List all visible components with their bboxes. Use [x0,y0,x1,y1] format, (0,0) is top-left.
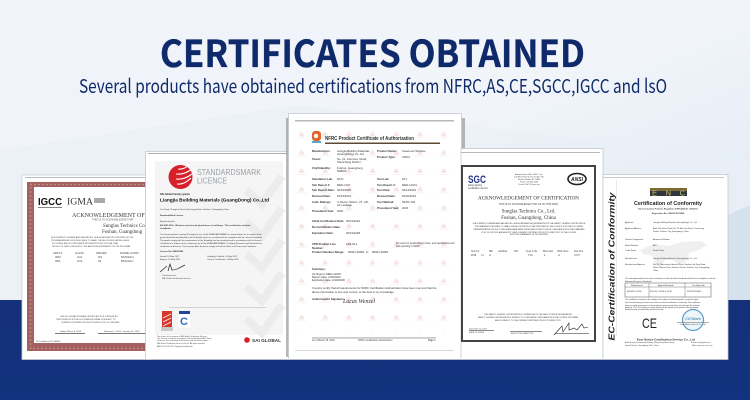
product information: NFRC 102 [402,200,416,204]
red badge [161,311,173,331]
SGCC logo: safety glazing [468,184,483,187]
IGMA logo: IGMA [67,198,93,208]
product information: Sim Report #: [312,183,330,187]
signature lines: Friday, March 8, 2024 [60,330,82,333]
signature lines: IG Certified by ETL SEMKO [36,340,61,343]
certified product table: 4810 [55,255,61,259]
product information: MED-1047 [337,183,351,187]
EC heading: Certification of Conformity [634,201,702,207]
licence details [160,208,263,261]
certificate: IGCC IGMA: THIS IS TO ACKNOWLEDGE THAT [92,218,134,222]
footer statement: CERTIFICATION IN THE IGCC/IGMA PROGRAM IS SUBJECT TO [56,318,116,321]
product information: above information is true and correct, to the best of my knowledge. [312,290,395,294]
small print: SAI Global Certification Services Pty Ltd. All rights reserved. [157,342,205,345]
conformity statement: does not imply assessment of the production process and does not authorize the marking [625,304,700,307]
product table: A [558,254,560,257]
footer statement: SAFETY GLAZING CERTIFICATION IS SUBJECT TO CONTINUING COMPLIANCE WITH THE COUNCIL PROGRAM [478,316,578,319]
issuer footer: East Notice Certification Service Co., Ltd [637,338,695,342]
product information: Initial Certification Date: [312,219,344,223]
product information: Expiration date: 2/19/2028 [312,278,345,282]
product information: MED-1047a [402,183,417,187]
product information: Sim Report Date: [312,188,335,192]
product information: and reporting in NFRC [396,245,420,248]
product table: 9036 [471,254,477,257]
product table: TTG [528,254,533,257]
certificate: EC conformity: Registration No.: ENC/21/01234/08 [652,212,685,215]
certificate: Standardsmark Licence: SAI Global Certification Services [162,277,191,280]
body copy: FOLLOWED ARE IN COMPLIANCE WITH ASTM E2190 FOR DUAL SEAL [52,242,119,245]
licence details: Current Certification: 14 May 2022 [207,258,239,261]
product information: Manufacturer: [312,149,331,153]
body copy: PROGRAM AND AS SUCH IS ELIGIBLE TO LABEL THE BELOW INSULATING GLASS [51,239,130,242]
licence details: Expires: 14 May 2025 [160,258,181,261]
product information: Procedural Year: [377,206,399,210]
conformity statement: and manufacturing processes have been checked and found in conformity. This certificate [625,301,700,304]
company details: Liangjia Building Materials (GuangDong) Co., Ltd. [653,221,697,224]
footer statement: AND IS SUBJECT TO THE CURRENT CERTIFIED PRODUCTS DIRECTORY [495,319,562,322]
standards table: EN14351-1:2006 [627,291,641,293]
contact block [514,173,544,186]
certificate: SGCC [461,148,603,360]
issuer footer [625,338,713,347]
product information: Product Type: [377,155,396,159]
product table: Attribute [498,250,508,253]
standards table: KN21031232801 [687,291,701,293]
product information: NFTL [337,177,344,181]
product information: Liangjia Building Materials [337,149,370,153]
contact block: Administrative Office: SGCC, Inc. [515,173,543,176]
company details: Liangjia Building Materials (GuangDong) Co., Ltd. [653,257,697,260]
product information: 2020 [402,206,409,210]
product information: Air Report: MED-1047b [312,272,342,276]
certificate: NFRC [286,114,465,360]
conformity stamp: East Notice Service Co., Ltd [680,323,706,326]
product information: 00001-00001 [348,250,365,254]
certified product table [53,251,140,263]
product information: Procedural Year: [312,209,334,213]
product information: 2020 [337,209,344,213]
Standardsmark logo [168,164,192,189]
acknowledgement heading: ACKNOWLEDGEMENT OF [72,213,145,219]
product information: Product Name: [377,149,397,153]
company details: Model Number: [625,245,639,247]
product table: 14 [481,254,484,257]
small print: This licence is the property of SAI Global Certification Services [157,335,207,338]
licence details: Certification Is Subject to the continuing use of the STANDARDSMARK. Certifying Schemes and Schedules for [160,242,262,245]
licence heading: STANDARDSMARK [197,168,262,177]
company details: Kinho Power [653,250,665,252]
product information: City/State/Zip: [312,166,331,170]
ANSI seal: ANSI [570,177,584,183]
product information: I hereby certify that all requirements for NFRC Certification Authorization have been met and that the [312,286,437,290]
certificate: Standardsmark Licence: Liangjia Building Materials (GuangDong) Co.,Ltd [160,198,269,204]
company details: The submitted product has been tested by us with the listed standard and found in compliance with the [625,277,717,280]
SAI Global logo: SAI GLOBAL [252,338,281,343]
company details: Aluminum Window [653,238,670,241]
conformity statement [625,298,700,311]
company details: Product Designation: [625,238,644,241]
company details: A19 [653,244,657,247]
issuer footer: Add: Huimei Commercial Building, Hang Kong Road, Hong [625,341,674,344]
company details: Manufacturer Address: [625,263,646,266]
product information: Product Number Range: [312,250,344,254]
product information: 02/19/2028 [346,231,360,235]
product information: U-Factor, SHGC, VT, CR, [337,200,369,204]
certified product table: CERT # [53,251,63,255]
body copy: CPSC 16 CFR 1201 AND ANSI Z97.1 AND CURRENT CERTIFIED PRODUCTS DIRECTORY OF THE COUNCIL [481,231,577,234]
product information: 02/03/2024 [337,188,351,192]
conformity statement: products. The CE marking as shown below can be affixed to the product after preparing [625,306,698,309]
NFRC footer [312,338,436,342]
product information: Test Report #: [377,183,396,187]
certificate: SGCC: Foshan, Guangdong, China [501,216,557,221]
signature lines: DATE OF ISSUE [469,331,485,334]
licence details: installation [160,227,172,230]
signature lines: EXECUTIVE DIRECTOR [511,333,534,335]
product table: A [489,254,491,257]
body copy [473,222,586,236]
SGCC logo: SGC [468,174,486,186]
accreditation badge [178,311,191,328]
company details: Add. 20th Jinhe Road, No. 21 Area 3rd Road, Chancheng [653,227,704,230]
licence details: Issued: 14 May 2022 [160,256,180,258]
signature [160,264,185,272]
conformity stamp [677,310,709,330]
small print: ABN 67 050 611 642. Registered in Australia. [157,345,194,348]
contact block: E-mail: SGCC@sgcc.org [519,183,539,186]
CE mark: CE [642,315,657,331]
signatory: Chief Executive [162,274,177,277]
product information: 528000 [337,169,347,173]
product information: Foshan, Guangdong [337,166,363,170]
certificate: EC conformity: EU Construction Products Regulation (CPR) (EU) No. 305/2011 [638,208,699,210]
product table [471,250,584,257]
footer statement: CURRENT CERTIFIED PRODUCTS DIRECTORY OF THE DATE [61,321,120,324]
certified product table: FRAME CONST. [120,251,140,255]
product table: Test Site [574,250,584,253]
company details: Applicant: [625,221,634,224]
company details: No. 20 Chancheng Industrial Zone, Number 3rd Ring Road [653,263,705,266]
product information [312,149,455,301]
ANSI seal [568,174,586,184]
conformity statement: the declaration of conformity and technical file. [625,308,664,311]
product information: Re-Certification Date: [312,225,341,229]
licence details: Licence No: SMKM1542 [160,250,184,253]
company name: Sunglas Technics Co. [103,224,146,229]
IGCC logo: IGCC [38,196,62,208]
product information: NTL [402,177,408,181]
standards table: Test Report No. [692,284,706,287]
ENC logo: ENC [652,188,686,197]
small print: This Licence is issued in accordance with the Standards Mark Terms [157,337,212,340]
product information: CPD Product Line [312,242,336,246]
licence details: Manufactured to [160,220,176,223]
signature lines [36,330,146,343]
certified product table: GLASS [75,251,84,255]
certificate: IGCC IGMA: Foshan, Guangdong [102,230,143,235]
product information: Air Leakage [337,203,352,207]
product table: 4 [544,254,546,257]
signature lines: February 1, 2024 - January 31, 2025 [104,330,140,333]
product information: LSS-NL1 [346,242,358,246]
NFRC footer: As of March 18, 2024 [312,339,335,342]
small print: of Licence. For verification of this licence visit the online register [157,339,208,342]
licence details: Yun Road, Zhangcha Street (Guicheng) District Foshan, Guangdong China [160,208,230,211]
product information: Revised Date: [377,194,396,198]
product information: Authorized IA Signature: [312,297,345,301]
company details: China [653,270,659,272]
certified product table: W4 [98,255,102,259]
NFRC footer: Page 1 [428,339,436,342]
standards table: Applied Standards [658,284,674,287]
licence details: StandardsMark Licence [160,214,184,217]
footer statement [478,313,578,322]
product table: With Class [557,250,568,253]
product information: Summary: [312,267,326,271]
certificate: EC conformity [603,174,728,360]
certified product table: H4 [98,259,102,263]
world map watermark [640,241,707,268]
SGCC logo: certification council [468,187,488,190]
standards table: Requirements [631,284,643,287]
body copy [51,236,134,248]
company details: following European Standards [625,280,652,283]
contact block: 100 West Main Street, PO Box 730 [514,176,544,178]
product information: Test Method: [377,200,394,204]
product information: Simulation Lab: [312,177,333,181]
product information: Test Date: [377,188,390,192]
issuer footer: E-mail: en@gmail.com [691,342,710,344]
licence details: Originally Certified: 14 May 2022 [207,255,238,258]
conformity stamp: CE/Mark [685,316,702,321]
product information: Shunchang District [337,160,361,164]
SGCC heading: ACKNOWLEDGEMENT OF CERTIFICATION [478,196,580,202]
body copy: PROGRAM AND IS ELIGIBLE TO LABEL THE BELOW PRODUCTS AS SPECIFIED BY THE COUNCIL FOR THE FOLLOWING [475,225,584,228]
product information: CWnd [402,155,410,159]
certificate: IGCC IGMA [22,175,152,360]
product information: Test Lab: [377,177,389,181]
SAI Global logo [244,337,281,343]
product information: 10/15/2024 [337,194,351,198]
company details: Trade Name: [625,250,637,252]
NFRC heading: NFRC Product Certificate of Authorization [325,136,414,142]
certificate: SGCC: THIS IS TO ACKNOWLEDGE THAT AS OF THIS DATE [499,203,558,206]
licensee name: SAI Global hereby grants [160,193,190,196]
watermark chevrons [246,176,282,333]
product information: Number: [312,246,324,250]
NFRC logo [312,131,321,143]
issuer footer: Jinshui District, Guangdong, Nan, China [625,344,660,347]
SGCC logo [468,174,488,190]
footer statement: THIS SAFETY GLAZING CERTIFICATION IS CURRENT AS OF THE DATE OF ISSUE SHOWN ABOVE [484,313,573,316]
certified product table: LIC1 [77,255,83,259]
product table: Mfr [489,250,493,253]
body copy: IS A CURRENT LICENSEE AND HAS MET ALL GUIDELINES AND REQUIREMENTS FOR THE SAFETY GLAZING CERTIFICATION [473,222,586,225]
signature lines [469,323,589,335]
product information: 02/14/2024 [402,188,416,192]
product information: (GuangDong) Co.,Ltd [337,152,364,156]
product table: Type Code [526,250,538,253]
product table: INC [514,250,519,253]
product table: Max Size [543,250,554,253]
product information: to [366,250,369,254]
licence details: goods described and detailed in the Schedule which are considered to be compliant with the relevant Standard. [160,236,263,239]
product information: For report or productline(s) sizes, and specification visit [396,242,455,245]
body copy: REPRESENTATIVE PRODUCT SPECIMENS HAVE BEEN TESTED AND FOUND TO BE IN COMPLIANCE WITH THE STANDARD [473,228,585,231]
product information: Street: [312,157,321,161]
company details: Applicant Address: [625,227,642,230]
contact block: Sackets Harbor, NY 13685 [518,178,540,181]
product information: Casement Window [402,149,426,153]
title: CERTIFICATES OBTAINED [160,24,585,78]
licence details: certificates and licence. This licensee does bound to comply with all the Rules and Terms and Conditions. [160,245,257,248]
company details: Street, Nanhai Town, Sanshui District, Foshan City, Guangdong, [653,266,710,269]
issuer footer: Web: www.enc-cert.com [692,344,713,347]
product information: 02/20/2024 [402,194,416,198]
product information: 00001-00001 [372,250,389,254]
product information: 02/19/2024 [346,219,360,223]
company details [625,221,717,283]
certificate: Standardsmark Licence [146,152,290,360]
certified product table: SPACER [96,251,107,255]
contact block: Phone: 315 646 2234 [520,182,538,184]
company name: Sunglas Technics Co., Ltd. [502,210,555,214]
product information: Report date: 2/19/2024 [312,275,341,279]
company details: District, Foshan City, Guangdong, China [653,230,690,233]
standards table [625,283,711,297]
product information: Expiration Date: [312,231,334,235]
footer statement: THE IGCC/IGMA PROGRAM CERTIFICATION IS CURRENT AS [60,315,118,318]
conformity statement: This certificate is based on the sample of the above mentioned product, technical report [625,298,699,301]
licence details: The goods comply with the requirements of the Standard and are manufactured in accordance with the licence. [160,239,262,242]
company details: Manufacturer: [625,257,638,260]
accreditation badge: C [180,316,188,328]
footer statement [56,315,120,324]
body copy: PRODUCTS THAT CONFORM TO THE ABOVE REQUIREMENTS OF THE PROGRAM [52,245,131,248]
vertical EC label: EC-Certification of Conformity [608,192,616,340]
licence details: The licence/system Licensed Through the use of the STANDARDSMARK as shown below are in respect of the [160,233,263,236]
NFRC footer: NFRC Certification Authorization [358,339,393,342]
product information: Revised Date: [312,194,331,198]
certified product table: LIC2 [77,259,83,263]
body copy: WITH THE STANDARDS OF PROCEDURES [510,233,549,236]
product table: SGCC# [471,250,480,253]
licence details: AS 2047-2014 - Windows and external glazed doors in buildings - This certification excludes [160,224,252,227]
body copy: IN A CURRENT LICENSEE AND HAS MET ALL GUIDELINES AND PROCEDURES OF THE [51,236,134,239]
product table: 12/07 [574,254,581,257]
certified product table: 4811 [55,259,61,263]
certified product table: BC/H10LC [121,259,134,263]
standards table: EN 1026 / 12208 & 12210 [650,291,672,293]
small print [157,335,212,348]
product information: No. 21, LiHu Ave. Road, [337,157,367,161]
certificate: Standardsmark Licence: LICENCE [197,176,227,186]
signature: Lucas Wenzel [342,299,375,305]
product information: Auth. Ratings: [312,200,331,204]
signature lines: November 23, 2023 [469,328,487,330]
certified product table: BC/W10LC [121,255,134,259]
